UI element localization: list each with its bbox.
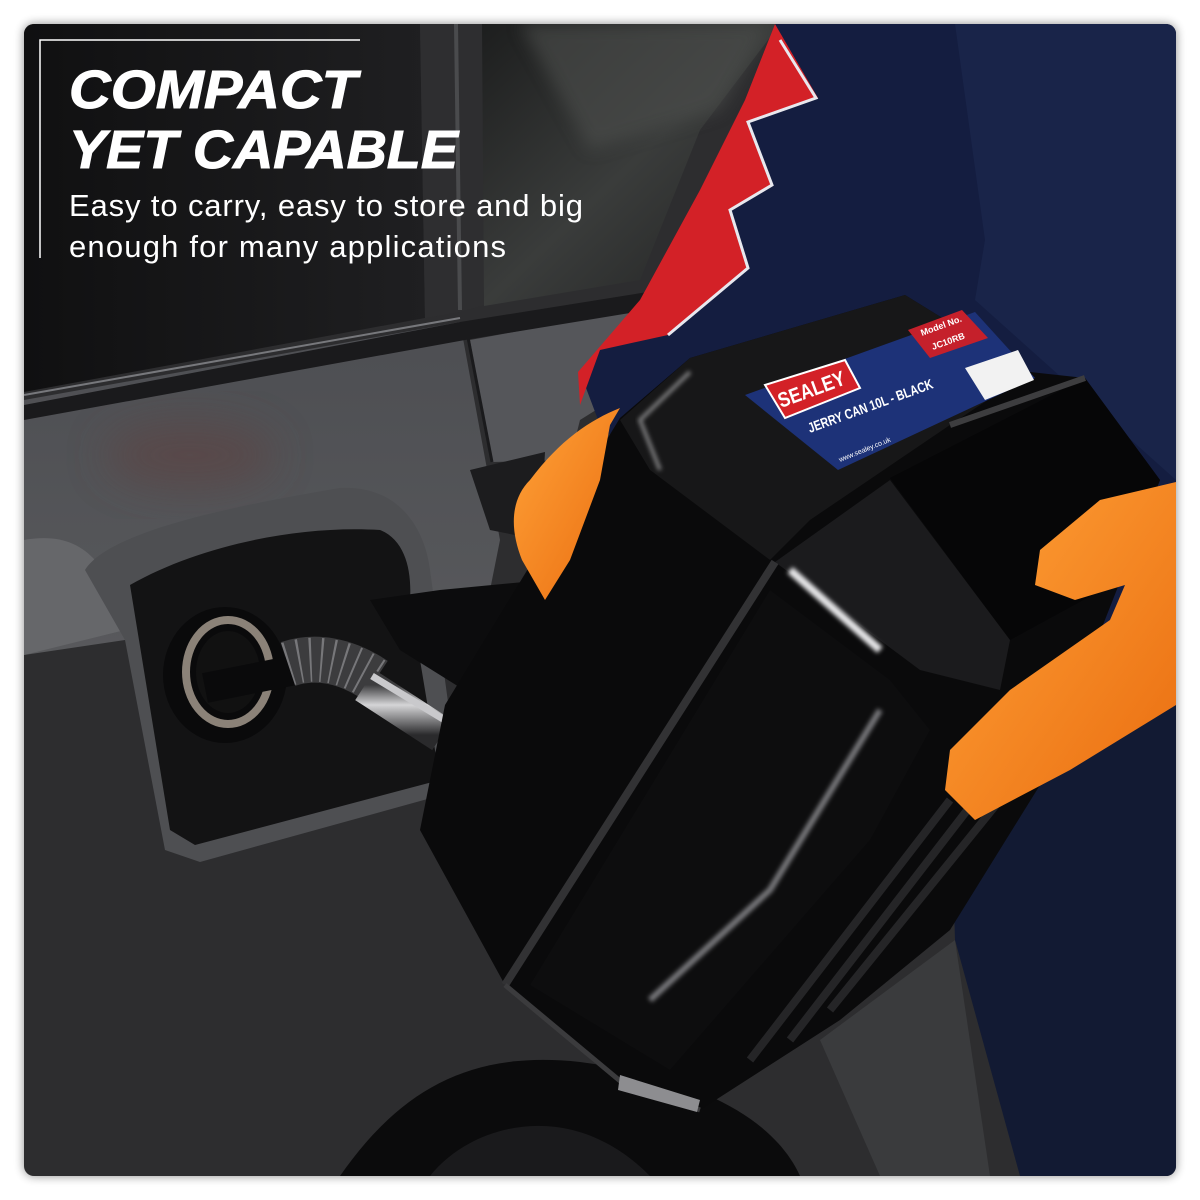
- subheading: Easy to carry, easy to store and big: [69, 188, 583, 223]
- heading: YET CAPABLE: [69, 120, 460, 180]
- product label: [745, 310, 1035, 470]
- car window right: [482, 24, 780, 306]
- product label: www.sealey.co.uk: [837, 437, 892, 464]
- product label: JC10RB: [930, 331, 967, 352]
- fuel filler neck: [163, 607, 287, 743]
- title frame: [40, 40, 360, 258]
- subheading: enough for many applications: [69, 229, 506, 264]
- jerry can: [420, 295, 1160, 1112]
- subheading: [69, 188, 583, 264]
- handle face: [1085, 378, 1160, 486]
- left orange glove: [514, 408, 620, 600]
- flexible spout: [205, 660, 448, 735]
- door pillar: [420, 24, 484, 318]
- heading: [69, 60, 460, 180]
- product label: JERRY CAN 10L - BLACK: [806, 376, 935, 436]
- rear wheel arch and tyre: [340, 940, 990, 1176]
- right orange glove: [945, 482, 1176, 820]
- sleeve and torso: [578, 24, 1176, 1176]
- car window left: [24, 24, 425, 392]
- product label: SEALEY: [775, 367, 848, 413]
- fuel filler door recess: [85, 452, 545, 862]
- product label: Model No.: [919, 314, 963, 338]
- heading: COMPACT: [69, 60, 361, 120]
